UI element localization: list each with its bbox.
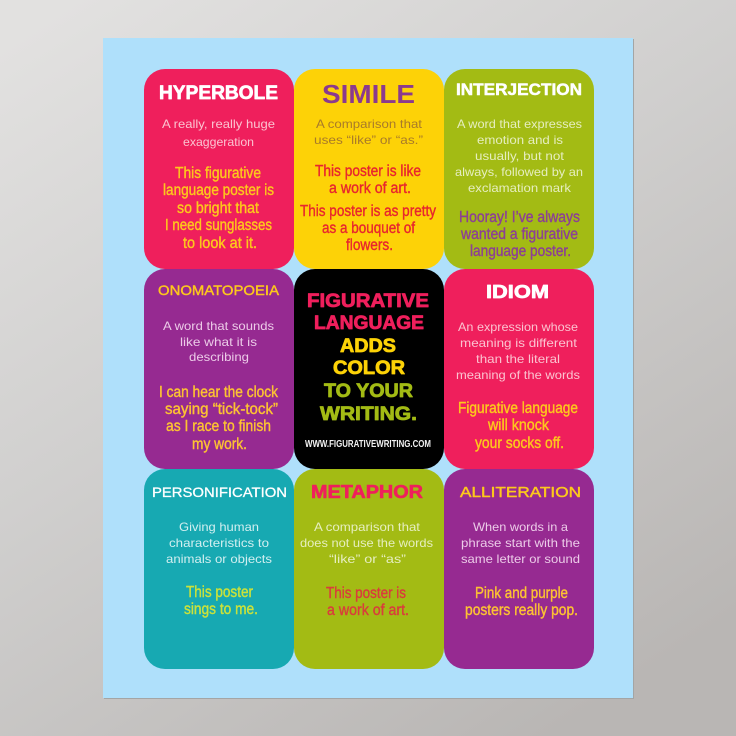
heading line: adds color <box>333 336 405 379</box>
heading line: to your writing: TO YOUR <box>324 381 413 402</box>
definition: interjection: always, followed by an <box>455 165 583 179</box>
heading line: figurative language: FIGURATIVE <box>307 291 429 312</box>
heading: metaphor: METAPHOR <box>311 482 423 502</box>
definition: simile: uses “like” or “as.” <box>314 133 423 147</box>
panel: center title card <box>294 269 444 469</box>
example: idiom: will knock <box>487 417 549 434</box>
example: onomatopoeia <box>159 384 278 453</box>
heading line: adds color: COLOR <box>333 358 405 379</box>
example: simile <box>300 163 436 254</box>
example: metaphor <box>326 585 409 619</box>
definition: hyperbole <box>162 117 275 149</box>
example: personification: sings to me. <box>184 601 258 618</box>
example: simile: a work of art. <box>329 180 411 197</box>
example: onomatopoeia: saying “tick-tock” <box>165 401 278 418</box>
definition: metaphor: does not use the words <box>300 536 433 550</box>
panel: simile <box>294 69 444 269</box>
definition: personification: characteristics to <box>169 536 269 550</box>
definition: idiom: An expression whose <box>458 320 578 334</box>
definition: metaphor: “like” or “as” <box>329 552 406 566</box>
heading: idiom: IDIOM <box>486 282 549 302</box>
example: alliteration <box>465 585 578 619</box>
example: interjection <box>459 209 580 260</box>
example: hyperbole: language poster is <box>163 182 274 199</box>
definition: interjection: usually, but not <box>475 149 565 163</box>
heading: hyperbole: HYPERBOLE <box>159 83 278 104</box>
definition: simile <box>314 117 423 147</box>
example: metaphor: This poster is <box>326 585 406 602</box>
panel: personification <box>144 469 294 669</box>
definition: personification: animals or objects <box>166 552 272 566</box>
example: alliteration: Pink and purple <box>475 585 568 602</box>
example: idiom: Figurative language <box>458 400 578 417</box>
heading line: figurative language <box>307 291 429 334</box>
heading: alliteration: ALLITERATION <box>460 484 581 501</box>
example: hyperbole: so bright that <box>177 200 260 217</box>
poster sheet <box>103 38 633 698</box>
definition: interjection <box>455 117 583 195</box>
example: personification: This poster <box>186 584 253 601</box>
panel: onomatopoeia <box>144 269 294 469</box>
panel: alliteration <box>444 469 594 669</box>
example: hyperbole <box>163 165 274 252</box>
heading: personification: PERSONIFICATION <box>152 484 287 500</box>
example: simile: This poster is like <box>315 163 421 180</box>
definition: onomatopoeia: describing <box>189 350 249 364</box>
definition: simile: A comparison that <box>316 117 423 131</box>
definition: onomatopoeia: like what it is <box>180 335 257 349</box>
definition: hyperbole: exaggeration <box>183 135 254 149</box>
definition: metaphor <box>300 520 433 566</box>
heading: simile: SIMILE <box>322 79 415 109</box>
example: hyperbole: This figurative <box>175 165 261 182</box>
definition: alliteration <box>461 520 580 566</box>
heading line: to your writing: WRITING. <box>320 404 417 425</box>
example: hyperbole: to look at it. <box>183 235 257 252</box>
definition: onomatopoeia <box>163 319 274 364</box>
example: idiom: your socks off. <box>475 435 564 452</box>
example: simile: as a bouquet of <box>322 220 416 237</box>
example: onomatopoeia: my work. <box>192 436 247 453</box>
definition: idiom: than the literal <box>476 352 560 366</box>
definition: hyperbole: A really, really huge <box>162 117 275 131</box>
definition: idiom: meaning of the words <box>456 368 580 382</box>
definition: idiom <box>456 320 580 382</box>
definition: alliteration: phrase start with the <box>461 536 580 550</box>
example: alliteration: posters really pop. <box>465 602 578 619</box>
website url: WWW.FIGURATIVEWRITING.COM <box>305 439 431 450</box>
heading line: to your writing <box>320 381 417 425</box>
poster shadow <box>104 39 634 699</box>
example: interjection: wanted a figurative <box>460 226 578 243</box>
panel: idiom <box>444 269 594 469</box>
definition: alliteration: When words in a <box>473 520 568 534</box>
panel: interjection <box>444 69 594 269</box>
example: metaphor: a work of art. <box>327 602 409 619</box>
example: hyperbole: I need sunglasses <box>165 217 272 234</box>
definition: metaphor: A comparison that <box>314 520 421 534</box>
heading line: figurative language: LANGUAGE <box>314 313 424 334</box>
heading: interjection: INTERJECTION <box>456 81 582 99</box>
definition: interjection: emotion and is <box>477 133 563 147</box>
definition: alliteration: same letter or sound <box>461 552 580 566</box>
definition: personification <box>166 520 272 566</box>
example: interjection: Hooray! I’ve always <box>459 209 580 226</box>
definition: interjection: A word that expresses <box>457 117 582 131</box>
example: idiom <box>458 400 578 452</box>
definition: idiom: meaning is different <box>460 336 578 350</box>
example: simile: flowers. <box>346 237 393 254</box>
example: onomatopoeia: I can hear the clock <box>159 384 278 401</box>
panel: metaphor <box>294 469 444 669</box>
definition: personification: Giving human <box>179 520 259 534</box>
heading: onomatopoeia: ONOMATOPOEIA <box>158 282 280 298</box>
panel: hyperbole <box>144 69 294 269</box>
example: onomatopoeia: as I race to finish <box>166 418 271 435</box>
heading line: adds color: ADDS <box>340 336 396 357</box>
example: interjection: language poster. <box>470 243 571 260</box>
example: personification <box>184 584 258 618</box>
definition: onomatopoeia: A word that sounds <box>163 319 274 333</box>
definition: interjection: exclamation mark <box>468 181 572 195</box>
example: simile: This poster is as pretty <box>300 203 436 220</box>
